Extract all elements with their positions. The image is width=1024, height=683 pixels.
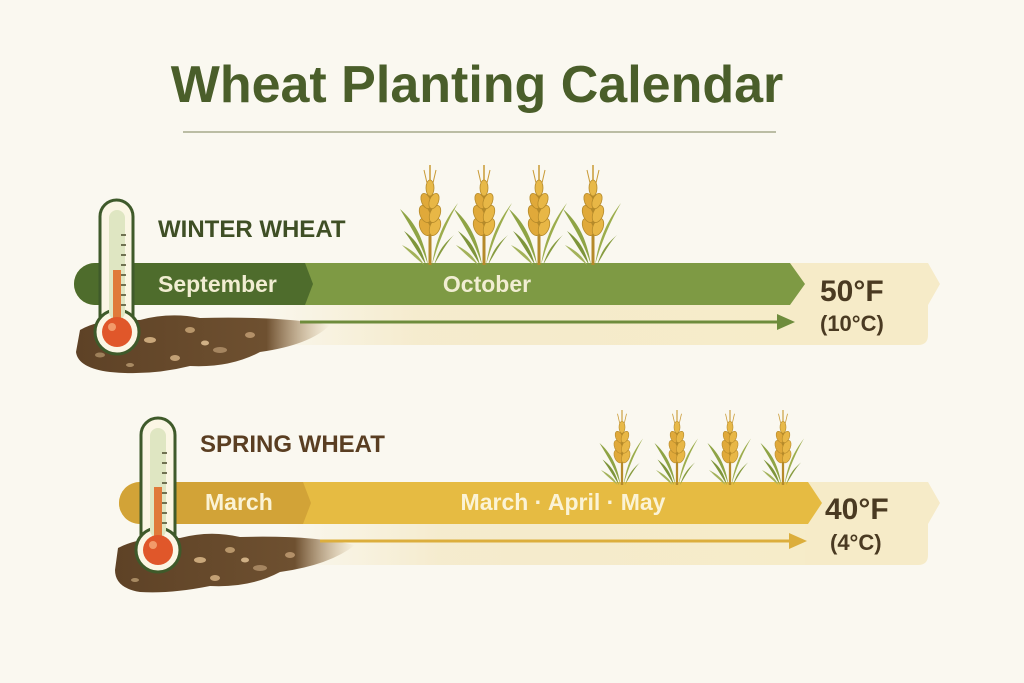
- soil winter: [76, 315, 330, 373]
- temperature spring: 40°F: [825, 493, 889, 526]
- temperature winter: (10°C): [820, 311, 884, 336]
- yellow bar: March · April · May: [461, 489, 666, 515]
- label spring wheat: SPRING WHEAT: [200, 431, 385, 458]
- title: Wheat Planting Calendar: [171, 56, 783, 114]
- temperature spring: (4°C): [830, 530, 882, 555]
- panel: winter wheat: [74, 165, 940, 373]
- green bar: October: [443, 271, 531, 297]
- soil spring: [115, 534, 355, 592]
- panel: spring wheat: [115, 410, 940, 592]
- thermometer spring: [136, 418, 180, 572]
- arrow spring: [320, 533, 807, 549]
- temperature tab spring: [805, 482, 940, 565]
- thermometer winter: [95, 200, 139, 354]
- temperature spring: [825, 493, 889, 555]
- cream band: [250, 300, 810, 345]
- arrow winter: [300, 314, 795, 330]
- temperature winter: [820, 275, 884, 336]
- wheat spring: [600, 410, 804, 485]
- wheat winter: [400, 165, 621, 265]
- yellow bar: [119, 482, 822, 524]
- temperature winter: 50°F: [820, 275, 884, 308]
- green bar: September: [158, 271, 277, 297]
- yellow bar: March: [205, 489, 273, 515]
- green bar: [74, 263, 805, 305]
- label winter wheat: WINTER WHEAT: [158, 216, 346, 243]
- temperature tab winter: [790, 263, 940, 345]
